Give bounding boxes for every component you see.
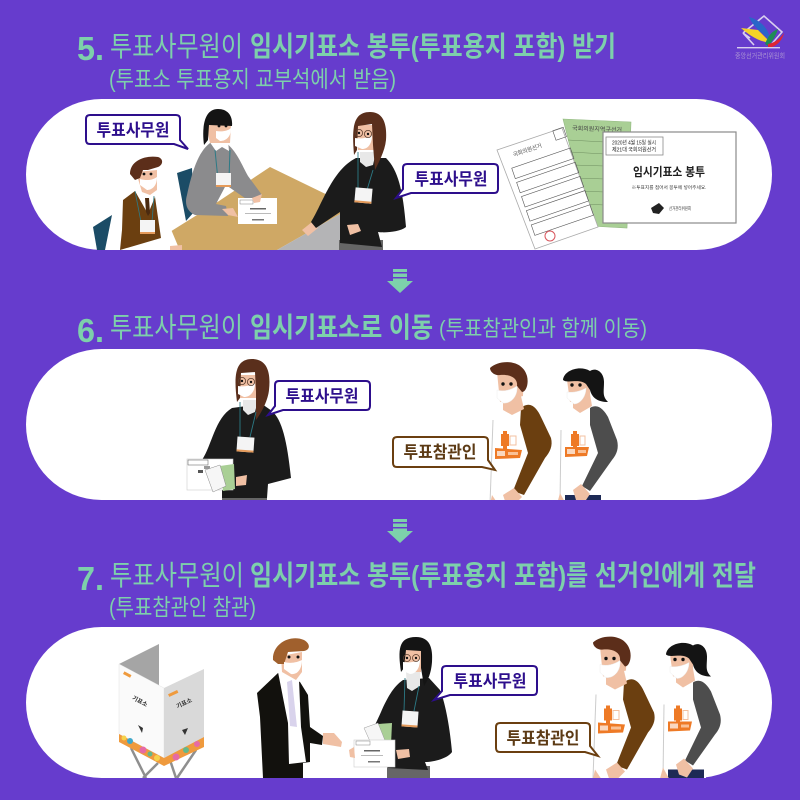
- illustration: voting booth: [119, 644, 204, 778]
- chair: seated man: [93, 215, 112, 250]
- green ballot: 국회의원지역구선거: [572, 124, 622, 134]
- callout: clerk: 투표사무원: [286, 387, 358, 406]
- table: [143, 167, 342, 250]
- heading: step 7: 7.: [77, 560, 104, 597]
- white ballot: [497, 127, 598, 249]
- envelope: 임시기표소 봉투: [633, 164, 705, 179]
- envelope: 2020년 4월 15일 실시: [612, 138, 656, 146]
- heading: step 7: 투표사무원이: [110, 560, 244, 591]
- illustration: voting booth: 기표소: [175, 696, 194, 710]
- heading: step 7: [77, 560, 756, 620]
- callout: clerk 2: 투표사무원: [414, 170, 488, 189]
- documents: ballots and envelope: [497, 119, 736, 249]
- callout: clerk 1: 투표사무원: [96, 121, 170, 140]
- arrow: step 6 to 7: [387, 519, 413, 543]
- white ballot: 국회의원선거: [512, 141, 543, 159]
- logo: election commission: [735, 16, 785, 60]
- callout: observer: [393, 437, 495, 470]
- panel: step 6: [26, 349, 772, 500]
- illustration: voter in suit: [257, 638, 342, 778]
- heading: step 6: [77, 312, 647, 349]
- envelope: [603, 132, 736, 223]
- callout: observer: 투표참관인: [506, 729, 580, 748]
- heading: step 5: 투표사무원이: [110, 31, 243, 62]
- standing clerk: [302, 112, 406, 250]
- arrow: step 5 to 6: [387, 269, 413, 293]
- heading: step 5: 임시기표소 봉투(투표용지 포함) 받기: [250, 31, 616, 62]
- illustration: staff at table: [93, 109, 406, 250]
- illustration: observers: [490, 362, 618, 504]
- panel: step 7: [26, 627, 772, 778]
- illustration: voting booth: 기표소: [131, 694, 150, 709]
- green ballot: [563, 119, 631, 228]
- panel: step 5: [26, 99, 772, 250]
- illustration: clerk handing envelope: [349, 637, 452, 778]
- callout: clerk: 투표사무원: [454, 672, 526, 691]
- envelope: ※투표지를 접어서 봉투에 넣어주세요.: [632, 184, 706, 191]
- heading: step 5: (투표소 투표용지 교부석에서 받음): [109, 66, 396, 92]
- illustration: observers: [593, 637, 721, 778]
- documents held: [187, 459, 247, 492]
- heading: step 6: 6.: [77, 312, 104, 349]
- callout: clerk 1: [86, 115, 188, 149]
- heading: step 6: 임시기표소로 이동: [250, 312, 433, 343]
- heading: step 5: [77, 30, 616, 92]
- envelope: 제21대 국회의원선거: [612, 146, 656, 154]
- callout: clerk: [268, 381, 370, 415]
- heading: step 6: 투표사무원이: [110, 312, 243, 343]
- illustration: clerk with documents: [187, 359, 291, 504]
- band masks below panels: [0, 250, 800, 800]
- callout: clerk 2: [396, 164, 498, 198]
- callout: observer: 투표참관인: [404, 443, 476, 462]
- envelope and ballots held: [349, 723, 410, 767]
- envelope: 선거관리위원회: [669, 205, 691, 212]
- callout: observer: [496, 723, 598, 756]
- heading: step 6: (투표참관인과 함께 이동): [439, 316, 647, 341]
- seated man: [118, 157, 182, 250]
- seated woman: [186, 109, 262, 216]
- envelope on table: [238, 198, 277, 224]
- heading: step 7: (투표참관인 참관): [109, 594, 256, 620]
- chair: seated woman: [177, 168, 194, 221]
- heading: step 5: 5.: [77, 30, 104, 67]
- logo: election commission: 중앙선거관리위원회: [735, 51, 785, 60]
- callout: clerk: [434, 666, 537, 700]
